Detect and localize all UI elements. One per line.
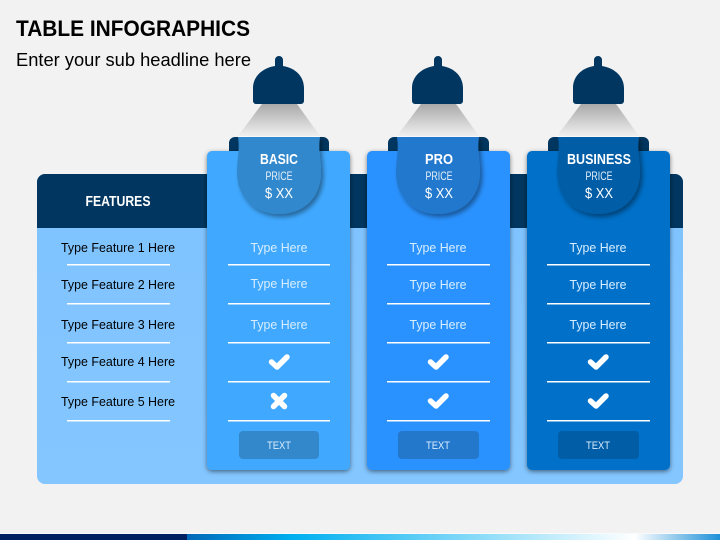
icon: check xyxy=(430,357,446,367)
tab backing xyxy=(548,137,649,167)
feature list: Type Feature 1 Here xyxy=(61,240,175,255)
icon: cross xyxy=(274,396,284,406)
price badge: PRICE xyxy=(266,171,293,183)
tab backing xyxy=(388,137,489,167)
rows xyxy=(547,240,650,422)
rows xyxy=(387,240,490,422)
price badge xyxy=(237,137,321,214)
lamp: pro xyxy=(397,56,479,138)
rows: Type Here xyxy=(570,240,626,255)
feature list: Type Feature 3 Here xyxy=(61,317,175,332)
lamp: basic xyxy=(238,56,320,138)
panel: pro plan xyxy=(367,56,510,470)
feature list: Type Feature 2 Here xyxy=(61,277,175,292)
card xyxy=(367,151,510,470)
icon: check xyxy=(272,357,287,367)
price badge: $ XX xyxy=(265,185,293,202)
rows: Type Here xyxy=(250,240,308,255)
icon: check xyxy=(590,396,606,406)
button xyxy=(239,431,319,459)
panel: features table xyxy=(37,174,683,484)
feature list xyxy=(61,240,175,422)
rows: Type Here xyxy=(570,317,626,332)
button: TEXT xyxy=(426,440,450,452)
footer bar xyxy=(0,533,720,540)
price badge: PRO xyxy=(425,151,453,168)
card xyxy=(207,151,350,470)
price badge: $ XX xyxy=(585,185,613,202)
panel: basic plan xyxy=(207,56,350,470)
button xyxy=(558,431,639,459)
subtitle: Enter your sub headline here xyxy=(16,49,251,70)
card xyxy=(527,151,670,470)
lamp: business xyxy=(557,56,639,138)
tab backing xyxy=(229,137,329,167)
rows: Type Here xyxy=(250,276,308,291)
button: TEXT xyxy=(586,440,610,452)
title: TABLE INFOGRAPHICS xyxy=(16,16,250,41)
rows: Type Here xyxy=(570,277,626,292)
rows: Type Here xyxy=(410,277,466,292)
price badge: BASIC xyxy=(260,151,298,168)
price badge: BUSINESS xyxy=(567,151,631,168)
price badge: $ XX xyxy=(425,185,453,202)
rows: Type Here xyxy=(250,317,308,332)
rows: Type Here xyxy=(410,317,466,332)
icon: check xyxy=(430,396,446,406)
panel: business plan xyxy=(527,56,670,470)
price badge: PRICE xyxy=(586,171,613,183)
feature list: Type Feature 4 Here xyxy=(61,354,175,369)
price badge xyxy=(557,137,640,214)
price badge xyxy=(396,137,480,214)
feature list: Type Feature 5 Here xyxy=(61,394,175,409)
button xyxy=(398,431,479,459)
price badge: PRICE xyxy=(426,171,453,183)
table header band xyxy=(37,174,683,228)
rows xyxy=(228,240,330,422)
rows: Type Here xyxy=(410,240,466,255)
table body xyxy=(37,174,683,484)
button: TEXT xyxy=(267,440,291,452)
icon: check xyxy=(590,357,606,367)
heading: features: FEATURES xyxy=(86,194,151,210)
